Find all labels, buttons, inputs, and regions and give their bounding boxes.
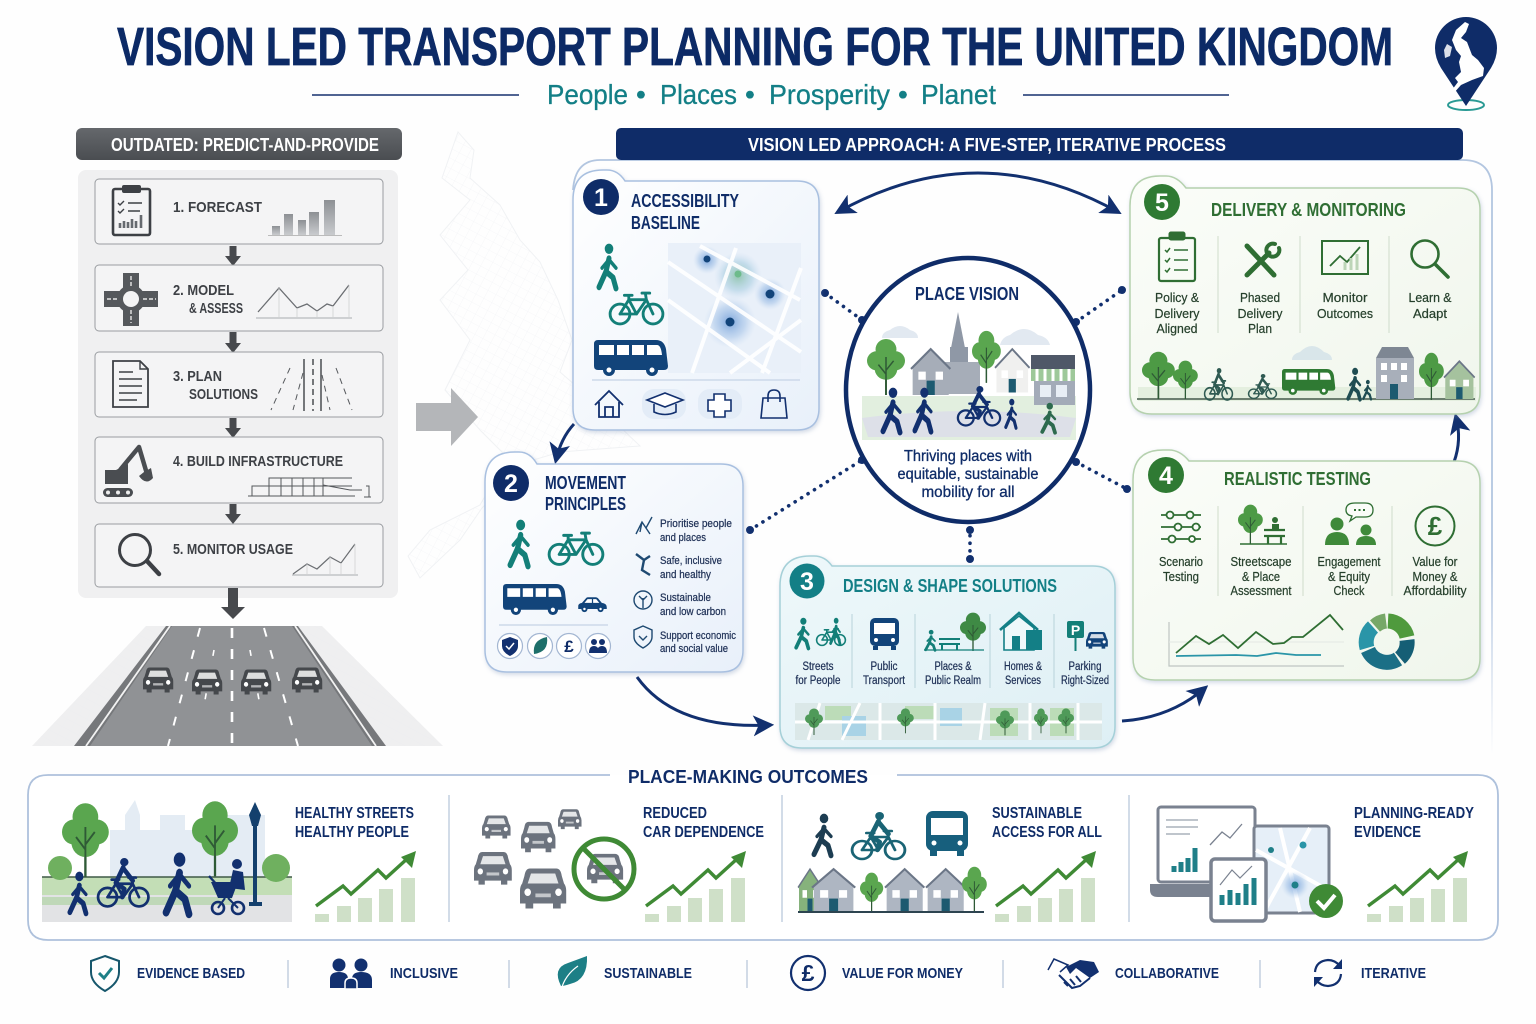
- icon: healthcare: [698, 389, 742, 419]
- labels: Places &: [934, 661, 972, 673]
- step: 2 model and assess: [95, 265, 383, 331]
- arrow: step 4 to 5: [1454, 417, 1459, 462]
- heading: MOVEMENT: [545, 473, 626, 493]
- subtitle: Prosperity: [769, 79, 890, 110]
- number badge: 1: [594, 184, 608, 212]
- outcome: planning-ready evidence: [1150, 805, 1475, 922]
- church: [935, 312, 980, 394]
- icon: magnifier: [1412, 240, 1448, 277]
- labels: Monitor: [1322, 290, 1368, 305]
- principles list: and healthy: [660, 569, 711, 581]
- step: 2 model and assess: 2. MODEL: [173, 282, 234, 299]
- label: [643, 805, 764, 841]
- vision statement: [898, 448, 1038, 501]
- icon: public transport: [870, 618, 899, 650]
- step: 2 model and assess: & ASSESS: [189, 300, 243, 317]
- step: 1 forecast: [95, 179, 383, 244]
- heading: outdated: OUTDATED: PREDICT-AND-PROVIDE: [111, 135, 379, 155]
- icon: shopping: [761, 390, 787, 418]
- icon: shield: [498, 634, 522, 658]
- arrow: top double arc: [838, 173, 1118, 212]
- subtitle: Planet: [921, 79, 996, 110]
- labels: Homes &: [1004, 661, 1042, 673]
- outcome: healthy streets: [42, 800, 416, 922]
- dividers: [1218, 236, 1389, 333]
- labels: Aligned: [1156, 321, 1198, 336]
- label: REDUCED: [643, 805, 707, 822]
- subtitle: •: [745, 79, 755, 110]
- panel: place-making outcomes: [28, 767, 1498, 940]
- icon: engagement: [1325, 503, 1376, 545]
- heading: PLACE-MAKING OUTCOMES: [628, 767, 868, 787]
- arrow: [225, 504, 241, 524]
- arrow: [225, 332, 241, 353]
- dividers: [1218, 506, 1392, 596]
- labels: Parking: [1068, 661, 1102, 673]
- icon: walker: [599, 245, 616, 288]
- dividers: [852, 614, 1054, 688]
- icon: streets for people: [796, 619, 845, 648]
- icon: places and public realm: [924, 613, 986, 651]
- panel background: [78, 170, 398, 598]
- number badge: [1148, 457, 1184, 493]
- icon: leaf: [528, 634, 552, 658]
- growth chart: [645, 851, 746, 922]
- cars and no-car sign: [474, 809, 634, 908]
- street map strip: [795, 703, 1102, 740]
- icon: parking: P: [1071, 622, 1080, 638]
- step: 1 forecast: 1. FORECAST: [173, 199, 262, 216]
- arrow: [225, 246, 241, 266]
- icon: walker: [510, 522, 528, 566]
- principles list: Safe, inclusive: [660, 555, 722, 567]
- icon: homes and services: [1000, 613, 1042, 650]
- principles list: [634, 517, 736, 655]
- heading: ACCESSIBILITY: [631, 191, 739, 211]
- vision statement: equitable, sustainable: [898, 466, 1038, 483]
- growth chart: [315, 851, 416, 922]
- cars: [143, 668, 322, 695]
- principle: value for money: £: [802, 960, 815, 986]
- labels: Streetscape: [1230, 555, 1292, 569]
- principle: iterative: [1314, 959, 1426, 987]
- icon: clipboard: [1159, 232, 1195, 281]
- step: 4 build infrastructure: 4. BUILD INFRASTRUCTURE: [173, 453, 343, 470]
- labels: Delivery: [1154, 306, 1200, 321]
- donut chart: [1366, 621, 1407, 662]
- label: [1354, 805, 1475, 841]
- labels: Adapt: [1413, 306, 1447, 321]
- label: PLANNING-READY: [1354, 805, 1475, 822]
- icon: document: [113, 361, 148, 407]
- labels: & Place: [1242, 570, 1280, 584]
- icon: UK map pin: [1435, 17, 1497, 110]
- principles strip: [91, 956, 1426, 991]
- labels: Money &: [1412, 570, 1458, 584]
- icon: pound: [556, 634, 582, 658]
- labels: Transport: [863, 675, 906, 687]
- number badge: 5: [1155, 189, 1169, 217]
- icon: bicycle: [549, 533, 603, 564]
- number badge: 4: [1159, 462, 1173, 490]
- subtitle: [312, 79, 1229, 110]
- step: 3 plan solutions: SOLUTIONS: [189, 386, 258, 403]
- icon: people: [586, 634, 610, 658]
- panel: outdated predict-and-provide: [76, 128, 402, 598]
- subtitle: •: [898, 79, 908, 110]
- panel: step 4 realistic testing: [1133, 450, 1480, 680]
- heading: [631, 191, 739, 233]
- dividers: [449, 795, 1129, 922]
- principle: evidence based: [91, 956, 245, 991]
- outcome: sustainable access: [798, 805, 1102, 922]
- bridge outline: [248, 478, 371, 497]
- icon: tools: [1247, 244, 1279, 275]
- labels: Engagement: [1318, 555, 1381, 569]
- icon: monitor chart: [1322, 241, 1368, 274]
- principle: collaborative: COLLABORATIVE: [1115, 965, 1219, 982]
- accessibility map: [668, 243, 801, 373]
- icon: parking: [1067, 621, 1108, 651]
- number badge: [583, 179, 619, 215]
- label: [992, 805, 1102, 841]
- labels: Learn &: [1408, 290, 1452, 305]
- icon: pound: £: [564, 637, 574, 656]
- principle: collaborative: [1048, 959, 1219, 988]
- heading: vision led approach: [616, 128, 1463, 160]
- step: 5 monitor usage: [95, 524, 383, 587]
- labels: for People: [796, 675, 840, 687]
- labels: Public Realm: [925, 675, 981, 687]
- principle: sustainable: [558, 956, 692, 990]
- labels: Services: [1005, 675, 1041, 687]
- arrow: grey transition arrow: [416, 388, 478, 446]
- icon: sliders: [1161, 512, 1201, 542]
- panel: step 2 movement principles: [485, 452, 743, 672]
- labels: Phased: [1240, 290, 1280, 305]
- panel: step 3 design and shape solutions: [780, 556, 1115, 748]
- heading: PRINCIPLES: [545, 494, 626, 514]
- icon: bus: [594, 340, 668, 376]
- arrow: [225, 418, 241, 438]
- step: 4 build infrastructure: [95, 437, 383, 503]
- delivery scene: [1137, 346, 1476, 401]
- heading: DELIVERY & MONITORING: [1211, 200, 1406, 220]
- icon: roundabout: [104, 273, 158, 326]
- icon: bus: [503, 584, 567, 615]
- labels: Check: [1334, 584, 1365, 598]
- growth chart: [995, 851, 1096, 922]
- heading: PLACE VISION: [915, 284, 1019, 304]
- label: ACCESS FOR ALL: [992, 824, 1102, 841]
- line chart: [292, 544, 358, 575]
- shop: [1031, 355, 1075, 405]
- heading: REALISTIC TESTING: [1224, 469, 1371, 489]
- principles list: and places: [660, 532, 706, 544]
- outcome: reduced car dependence: [474, 805, 764, 922]
- labels: Plan: [1248, 321, 1272, 336]
- icon: pound: £: [1428, 511, 1443, 541]
- heading: outdated: [76, 128, 402, 160]
- principle: value for money: VALUE FOR MONEY: [842, 965, 963, 982]
- labels: [796, 661, 1109, 687]
- labels: Right-Sized: [1061, 675, 1109, 687]
- faint UK map background: [408, 132, 640, 578]
- principles list: and low carbon: [660, 606, 726, 618]
- label: HEALTHY PEOPLE: [295, 824, 409, 841]
- outer frame: [573, 160, 1492, 755]
- labels: Value for: [1412, 555, 1458, 569]
- icon: clipboard: [113, 185, 150, 235]
- principle: iterative: ITERATIVE: [1361, 965, 1426, 982]
- number badge: 2: [504, 470, 518, 498]
- panel: place vision circle: [846, 258, 1090, 522]
- heading: BASELINE: [631, 213, 700, 233]
- principles list: Sustainable: [660, 592, 711, 604]
- principle: inclusive: [330, 958, 458, 989]
- principles list: Prioritise people: [660, 518, 732, 530]
- label: [295, 805, 414, 841]
- road plan lines: [271, 359, 352, 411]
- number badge: 3: [800, 568, 814, 596]
- labels: Assessment: [1230, 584, 1292, 598]
- labels: Outcomes: [1317, 306, 1373, 321]
- step: 3 plan solutions: [95, 352, 383, 417]
- icon: bicycle: [610, 293, 663, 324]
- bar chart: [268, 200, 342, 236]
- panel: step 5 delivery and monitoring: [1130, 176, 1480, 414]
- subtitle: People: [547, 79, 628, 110]
- labels: [1154, 290, 1452, 336]
- number badge: [1144, 184, 1180, 220]
- principles list: and social value: [660, 643, 728, 655]
- arrow: to road: [221, 588, 245, 619]
- labels: Public: [870, 661, 898, 673]
- icon: pound: [1416, 506, 1454, 546]
- icon: home: [595, 391, 623, 417]
- heading: DESIGN & SHAPE SOLUTIONS: [843, 576, 1057, 596]
- principles list: Support economic: [660, 630, 736, 642]
- principle: value for money: [791, 956, 963, 990]
- arrow: step 2 to 3: [637, 677, 770, 725]
- labels: Policy &: [1155, 290, 1199, 305]
- modes and homes: [798, 811, 987, 913]
- principle: sustainable: SUSTAINABLE: [604, 965, 692, 982]
- number badge: [790, 564, 824, 598]
- road illustration: [32, 626, 443, 746]
- labels: Affordability: [1404, 584, 1467, 598]
- step: 3 plan solutions: 3. PLAN: [173, 368, 222, 385]
- label: EVIDENCE: [1354, 824, 1421, 841]
- labels: Testing: [1163, 570, 1199, 584]
- arrow: step 3 to 4: [1122, 688, 1205, 721]
- icon: magnifier: [120, 534, 159, 574]
- labels: Streets: [802, 661, 834, 673]
- icon: excavator: [103, 447, 153, 497]
- principle: inclusive: INCLUSIVE: [390, 965, 458, 982]
- label: SUSTAINABLE: [992, 805, 1082, 822]
- line chart: [256, 285, 352, 318]
- labels: & Equity: [1328, 570, 1371, 584]
- labels: [1159, 555, 1467, 598]
- icon: car: [578, 597, 607, 612]
- icon: education: [642, 389, 686, 419]
- growth chart: [1367, 851, 1468, 922]
- line chart: [1169, 615, 1344, 666]
- panel: vision led approach: [485, 128, 1492, 755]
- dotted connectors: [746, 286, 1130, 562]
- vision statement: Thriving places with: [904, 448, 1032, 465]
- icon: streetscape: [1238, 505, 1287, 544]
- street scene: [42, 800, 292, 922]
- label: HEALTHY STREETS: [295, 805, 414, 822]
- devices: [1150, 807, 1343, 921]
- town scene: [862, 312, 1076, 440]
- subtitle: •: [636, 79, 646, 110]
- heading: vision led approach: VISION LED APPROACH: A FIVE-STEP, ITERATIVE PROCESS: [748, 135, 1226, 155]
- vision statement: mobility for all: [922, 484, 1014, 501]
- heading: [545, 473, 626, 514]
- panel: step 1 accessibility baseline: [573, 170, 819, 430]
- arrow: step 1 to 2: [556, 424, 574, 460]
- step: 5 monitor usage: 5. MONITOR USAGE: [173, 541, 293, 558]
- subtitle: Places: [660, 79, 737, 110]
- labels: Delivery: [1238, 306, 1283, 321]
- label: CAR DEPENDENCE: [643, 824, 764, 841]
- labels: Scenario: [1159, 555, 1203, 569]
- principle: evidence based: EVIDENCE BASED: [137, 965, 245, 982]
- number badge: [493, 465, 529, 501]
